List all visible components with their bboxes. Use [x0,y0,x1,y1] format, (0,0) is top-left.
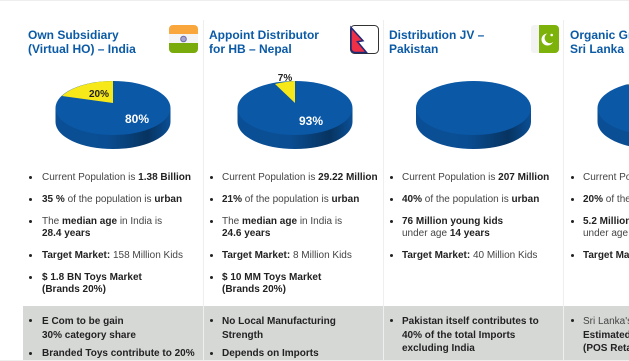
heading: Pakistan [389,28,484,56]
heading: Sri Lanka: Sri Lanka [570,42,624,56]
column 2 facts: (Brands 20%) [222,284,286,295]
heading: Nepal: for HB – Nepal [209,42,292,56]
heading: India [28,28,136,56]
column 1 facts: 35 % of the population is urban [42,194,182,205]
column 1 facts: The median age in India is [42,216,162,227]
column 2 facts: 21% of the population is urban [222,194,359,205]
column 2 facts [210,172,378,359]
column 1 facts: Target Market: 158 Million Kids [42,250,183,261]
pie: India: 80% [125,112,149,126]
column 1 facts: E Com to be gain [42,316,124,327]
column 1 facts: $ 1.8 BN Toys Market [42,272,142,283]
grey strategy band [23,306,629,360]
column 2 facts: Current Population is 29.22 Million [222,172,378,183]
column 1 facts: (Brands 20%) [42,284,106,295]
heading: India: Own Subsidiary [28,28,119,42]
heading: India: (Virtual HO) – India [28,42,136,56]
column 2 facts: Target Market: 8 Million Kids [222,250,352,261]
column 1 facts: Branded Toys contribute to 20% [42,348,195,359]
column 3 facts: Current Population is 207 Million [402,172,549,183]
heading: Pakistan: Distribution JV – [389,28,484,42]
column 2 facts: 24.6 years [222,228,270,239]
column 2 facts: The median age in India is [222,216,342,227]
column 3 facts: 40% of the population is urban [402,194,539,205]
pie: India: 20% [89,89,109,100]
column 1 facts: Current Population is 1.38 Billion [42,172,191,183]
pie: Nepal: 93% [299,114,323,128]
column 3 facts: 40% of the total Imports [402,330,515,340]
pie: India [56,81,170,149]
column 1 facts [29,172,195,359]
flag: Pakistan [531,25,559,53]
column 1 facts: 28.4 years [42,228,90,239]
heading: Pakistan: Pakistan [389,42,438,56]
heading: Nepal: Appoint Distributor [209,28,319,42]
flag: Nepal [350,25,379,54]
pie: Nepal [238,73,352,149]
pie: Nepal: 7% [278,73,292,84]
column 3 facts: under age 14 years [402,228,490,239]
column 3 facts: Target Market: 40 Million Kids [402,250,537,261]
column dividers [203,20,204,360]
column 2 facts: Strength [222,330,263,341]
column 4 facts [571,172,629,354]
flag: India [169,25,198,53]
column 3 facts: 76 Million young kids [402,216,503,227]
pie: Sri Lanka [598,81,629,149]
column 2 facts: $ 10 MM Toys Market [222,272,321,283]
column 2 facts: No Local Manufacturing [222,316,336,327]
column 2 facts: Depends on Imports [222,348,319,359]
column 3 facts: excluding India [402,343,475,354]
column 3 facts: Pakistan itself contributes to [402,316,539,327]
pie: Pakistan [416,81,531,149]
column 3 facts [390,172,549,354]
column 1 facts: 30% category share [42,330,136,341]
heading: Nepal [209,28,319,56]
heading: Sri Lanka [570,28,629,56]
